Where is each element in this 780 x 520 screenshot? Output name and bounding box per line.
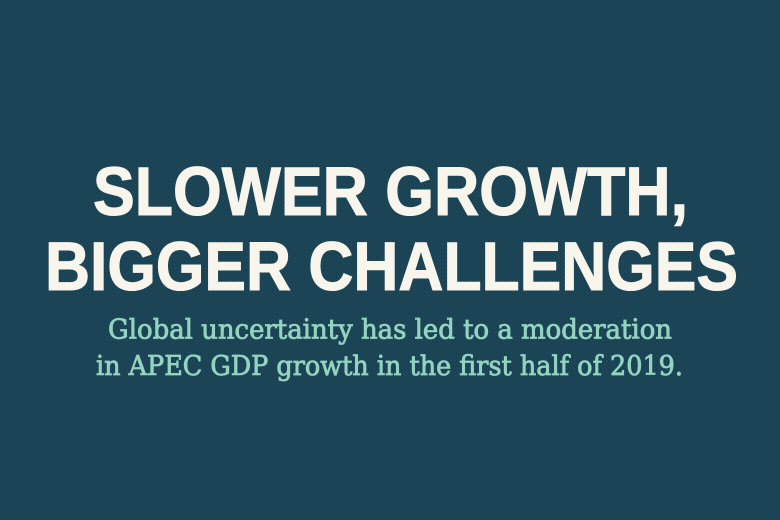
title: [45, 153, 738, 305]
title: SLOWER GROWTH,: [93, 153, 688, 230]
subtitle: Global uncertainty has led to a moderation: [108, 314, 672, 346]
subtitle: [96, 314, 683, 382]
subtitle: in APEC GDP growth in the first half of 2019.: [96, 351, 683, 382]
